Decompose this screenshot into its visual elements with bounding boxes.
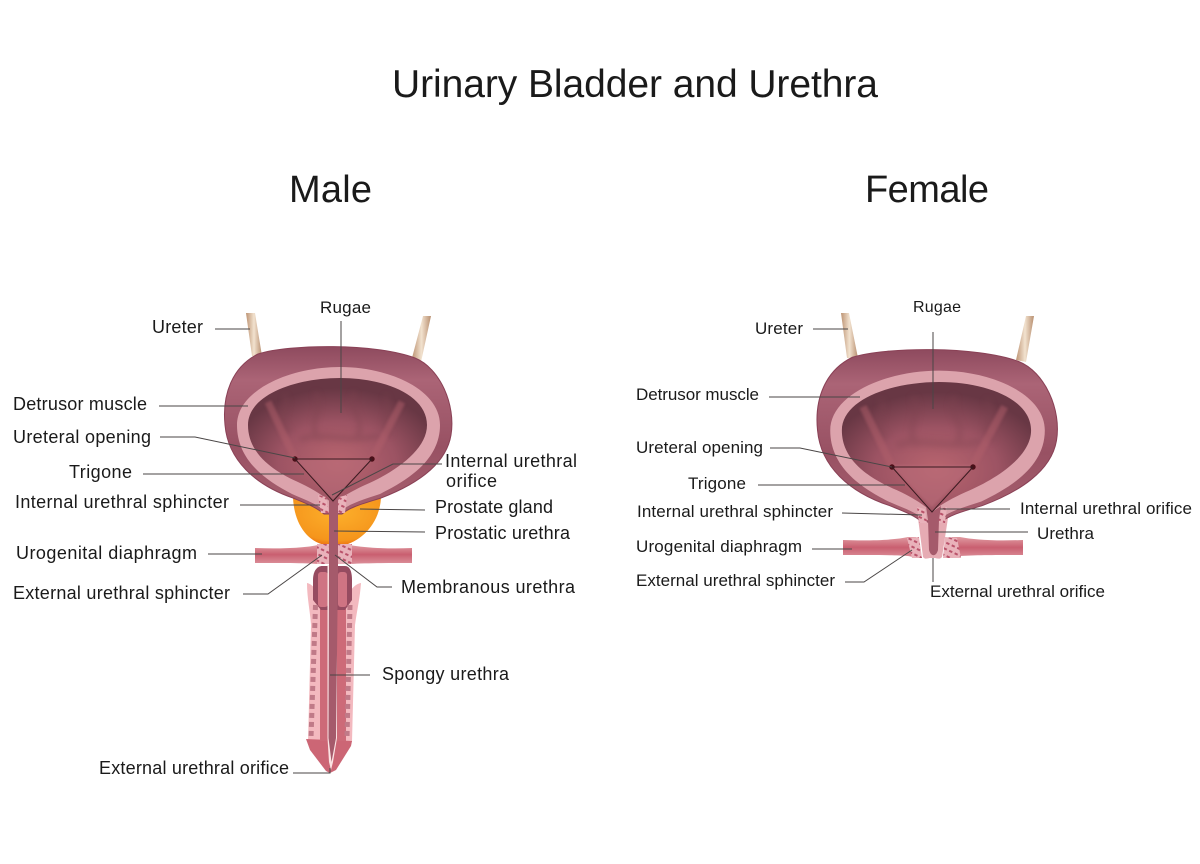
diagram: male anatomy [224,313,452,773]
label: urogenital diaphragm: Urogenital diaphragm [16,543,197,563]
label: trigone: Trigone [688,474,746,493]
label: rugae [320,298,371,413]
label: rugae: Rugae [320,298,371,317]
label: internal urethral orifice [332,451,577,495]
label: external urethral orifice: External urethral orifice [930,582,1105,601]
label: trigone: Trigone [69,462,132,482]
icon: prostate gland [293,495,381,545]
label: ureter [755,319,848,338]
icon: internal urethral sphincter [318,495,347,513]
icon: penis and spongy urethra [306,497,361,773]
label: detrusor muscle: Detrusor muscle [13,394,147,414]
label: ureteral opening: Ureteral opening [13,427,151,447]
male internal lines [292,456,375,501]
icon: male bladder [224,347,452,514]
icon: female urethra [926,506,941,555]
diagram: female anatomy [817,313,1057,559]
label: internal urethral sphincter: Internal urethral sphincter [637,502,833,521]
label: spongy urethra: Spongy urethra [382,664,510,684]
label: urogenital diaphragm: Urogenital diaphragm [636,537,802,556]
icon: female sphincters [907,507,961,558]
label: detrusor muscle: Detrusor muscle [636,385,759,404]
title: Urinary Bladder and Urethra [392,63,878,106]
label: membranous urethra [335,555,576,597]
label: prostate gland: Prostate gland [435,497,553,517]
labels: female [636,299,1192,601]
label: external urethral sphincter [13,555,322,603]
heading: female: Female [865,169,989,211]
label: external urethral sphincter [636,550,912,590]
icon: male ureters [246,313,431,362]
icon: urogenital diaphragm [255,544,412,564]
label: ureter: Ureter [152,317,203,337]
label: internal urethral sphincter: Internal urethral sphincter [15,492,229,512]
label: urethra: Urethra [1037,524,1095,543]
label: external urethral sphincter: External urethral sphincter [13,583,230,603]
icon: female urogenital diaphragm [843,537,1023,558]
labels: male [13,298,577,778]
label: ureteral opening [636,438,892,467]
label: prostatic urethra: Prostatic urethra [435,523,571,543]
label: rugae [913,299,961,409]
female internal lines [889,464,976,512]
label: external urethral sphincter: External urethral sphincter [636,571,835,590]
label: internal urethral orifice: Internal urethral orifice [1020,499,1192,518]
label: ureteral opening [13,427,295,458]
label: internal urethral orifice: Internal urethral [445,451,577,471]
icon: female urethra wall [918,505,948,559]
label: ureteral opening: Ureteral opening [636,438,763,457]
label: ureter [152,317,250,337]
label: ureter: Ureter [755,319,803,338]
icon: female bladder [817,350,1057,522]
label: internal urethral orifice: orifice [446,471,497,491]
label: membranous urethra: Membranous urethra [401,577,576,597]
heading: male: Male [289,169,372,211]
label: external urethral orifice: External urethral orifice [99,758,289,778]
label: rugae: Rugae [913,299,961,316]
icon: female ureters [841,313,1034,362]
